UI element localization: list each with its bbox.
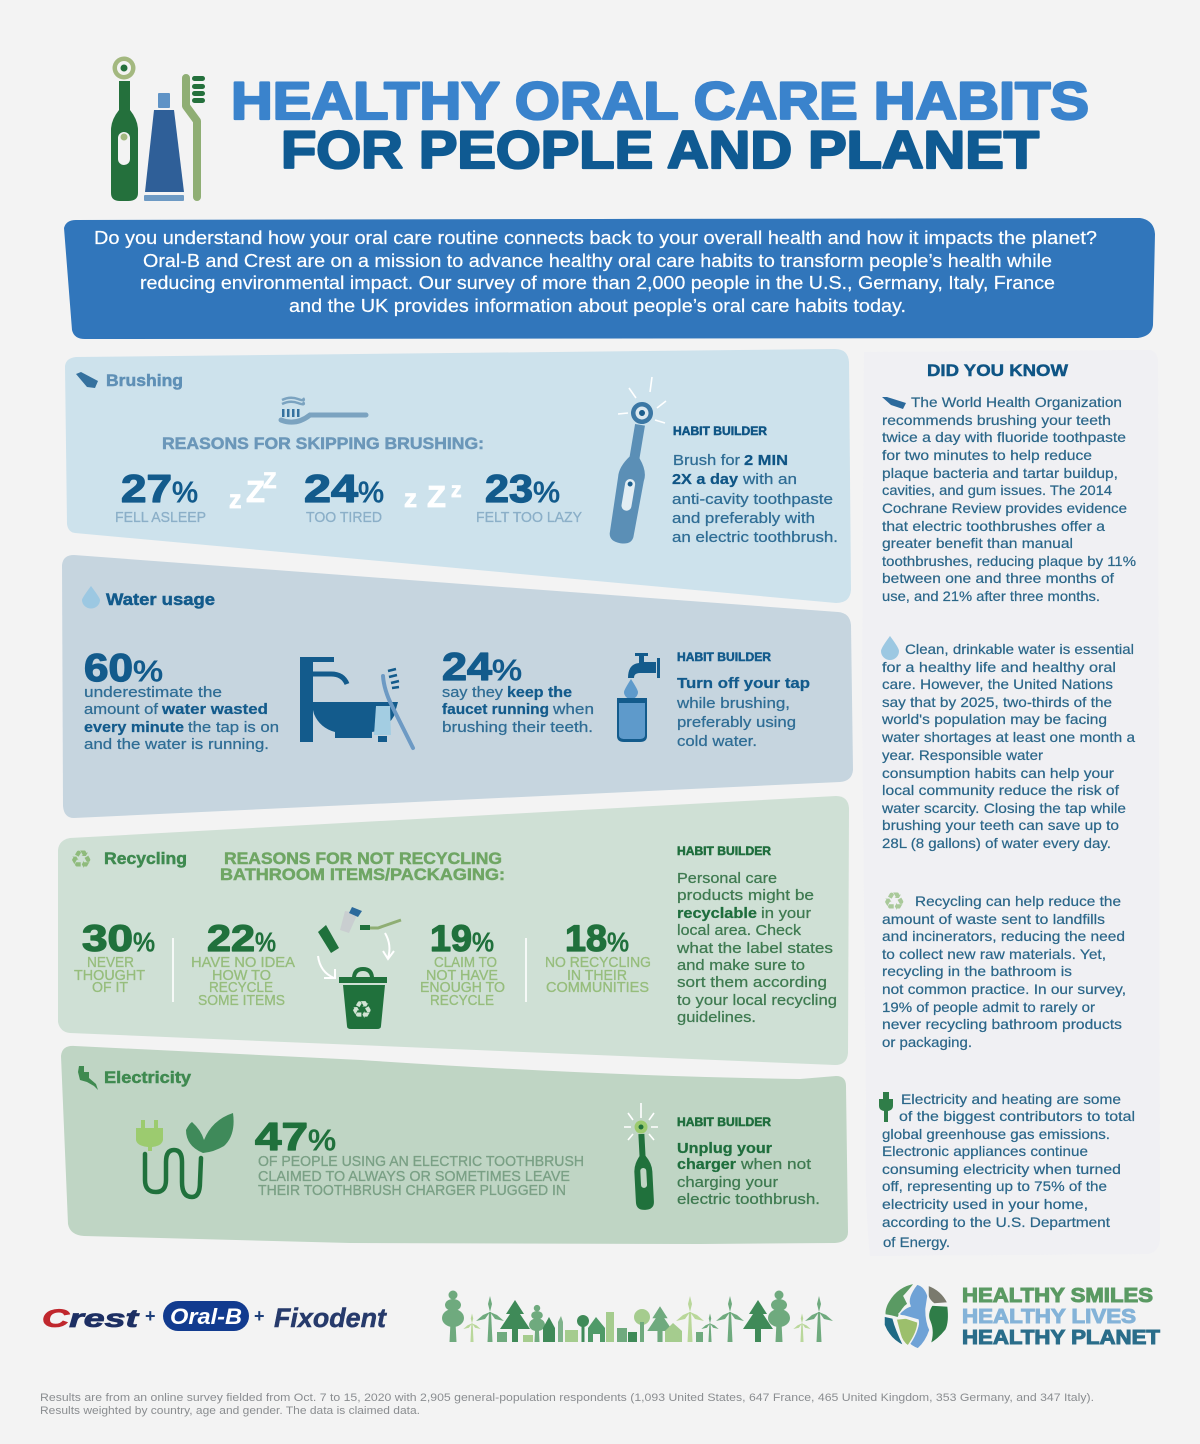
habit builder: brushing: an electric toothbrush. <box>672 529 838 546</box>
stat: 47%: OF PEOPLE USING AN ELECTRIC TOOTHBRUSH <box>258 1154 584 1170</box>
stat: 30%: OF IT <box>92 980 128 996</box>
stat: 19%: RECYCLE <box>430 993 494 1009</box>
did you know: water text: care. However, the United Nations <box>882 676 1113 692</box>
did you know: brushing text: Cochrane Review provides evidence <box>882 500 1127 516</box>
intro banner: Oral-B and Crest are on a mission to advance healthy oral care habits to transform people’s health while <box>143 251 1052 271</box>
stat: 23% felt too lazy: % <box>533 477 560 509</box>
stat: 24% too tired: TOO TIRED <box>306 510 382 526</box>
stat: 47%: CLAIMED TO ALWAYS OR SOMETIMES LEAVE <box>258 1169 570 1185</box>
stat: 22%: 22 <box>207 918 255 959</box>
title <box>231 72 1089 180</box>
heading: did you know: DID YOU KNOW <box>927 361 1069 380</box>
panel: did you know <box>862 350 1160 1256</box>
stat: 47%: % <box>308 1125 336 1157</box>
stat: 22%: RECYCLE <box>209 980 273 996</box>
habit builder: recycling: Personal care <box>677 870 777 887</box>
habit builder: brushing: HABIT BUILDER <box>673 426 768 438</box>
did you know: brushing text: toothbrushes, reducing plaque by 11% <box>882 553 1136 569</box>
did you know: electricity text: according to the U.S. Department <box>882 1214 1110 1230</box>
title: FOR PEOPLE AND PLANET <box>281 121 1039 180</box>
stat: 24%: when <box>552 701 594 718</box>
tagline: healthy smiles healthy lives healthy planet <box>962 1285 1160 1349</box>
stat: 19%: CLAIM TO <box>434 955 497 971</box>
stat: 24% too tired: % <box>358 477 384 509</box>
stat: 24% too tired <box>304 468 384 526</box>
stat: 19%: NOT HAVE <box>426 968 498 984</box>
panel: water usage <box>62 555 853 818</box>
stat: 19%: ENOUGH TO <box>420 980 505 996</box>
heading: water usage: Water usage <box>106 590 215 609</box>
habit builder: electricity: charger <box>677 1156 736 1173</box>
did you know: recycling text: and incinerators, reducing the need <box>882 928 1125 944</box>
footnote: Results weighted by country, age and gender. The data is claimed data. <box>40 1405 420 1417</box>
icon: sleep z <box>229 468 276 514</box>
habit builder: recycling: in your <box>761 905 811 922</box>
habit builder: brushing: with an <box>742 471 797 488</box>
habit builder: recycling: what the label states <box>676 940 833 957</box>
stat: 24% <box>442 646 594 736</box>
did you know: recycling text: recycling in the bathroom is <box>882 963 1072 979</box>
stat: 47%: THEIR TOOTHBRUSH CHARGER PLUGGED IN <box>258 1183 566 1199</box>
panel: brushing <box>65 349 851 603</box>
habit builder: brushing: and preferably with <box>672 510 815 527</box>
habit builder: recycling: recyclable <box>677 905 757 922</box>
intro banner: reducing environmental impact. Our survey of more than 2,000 people in the U.S., Germany, Italy, France <box>140 273 1055 293</box>
stat: 47% <box>255 1116 584 1199</box>
icon: electric toothbrush <box>624 1103 658 1210</box>
did you know: brushing text: use, and 21% after three months. <box>882 588 1100 604</box>
icon: sleep z second <box>404 479 462 514</box>
did you know: electricity text: of the biggest contributors to total <box>899 1108 1135 1124</box>
stat: 60%: every minute <box>84 719 184 736</box>
icon: sink faucet and toothbrush <box>300 657 413 748</box>
did you know: brushing text: recommends brushing your teeth <box>882 412 1111 428</box>
stat: 22%: % <box>255 927 276 957</box>
habit builder: water: while brushing, <box>676 695 790 712</box>
subheading: reasons for not recycling: REASONS FOR NOT RECYCLING <box>224 849 502 868</box>
illustration: green town with turbines and trees <box>442 1290 833 1342</box>
habit builder: electricity: Unplug your <box>677 1140 772 1157</box>
did you know: brushing text: for two minutes to help reduce <box>882 447 1092 463</box>
tagline: healthy smiles healthy lives healthy planet: HEALTHY LIVES <box>962 1306 1136 1328</box>
intro banner: Do you understand how your oral care routine connects back to your overall health and how it impacts the planet? <box>94 228 1097 248</box>
stat: 24%: % <box>492 655 522 687</box>
stat: 60%: underestimate the <box>84 684 222 701</box>
icon: plug <box>78 1066 98 1090</box>
intro banner: and the UK provides information about people’s oral care habits today. <box>289 296 906 316</box>
icon: sleep z second: z <box>451 479 462 502</box>
did you know: brushing text: between one and three months of <box>882 570 1114 586</box>
habit builder: brushing: anti-cavity toothpaste <box>672 491 833 508</box>
did you know: electricity text: of Energy. <box>883 1234 950 1250</box>
habit builder: water: preferably using <box>677 714 796 731</box>
tagline: healthy smiles healthy lives healthy planet: HEALTHY PLANET <box>962 1327 1160 1349</box>
icon: electric toothbrush <box>607 377 666 545</box>
icon: water drop <box>82 586 100 608</box>
stat: 19%: % <box>472 927 494 957</box>
stat: 18%: COMMUNITIES <box>546 980 649 996</box>
logo: globe <box>884 1283 949 1349</box>
stat: 24%: 24 <box>442 646 492 689</box>
stat: 30%: % <box>133 927 155 957</box>
icon: plug and leaf <box>136 1113 234 1197</box>
stat: 60% <box>84 647 279 753</box>
did you know: recycling text <box>882 887 1126 1050</box>
habit builder: recycling <box>676 846 837 1026</box>
habit builder: electricity: charging your <box>677 1174 778 1191</box>
tagline: healthy smiles healthy lives healthy planet: HEALTHY SMILES <box>962 1285 1153 1307</box>
did you know: electricity text: consuming electricity when turned <box>882 1161 1121 1177</box>
habit builder: electricity <box>677 1117 820 1208</box>
habit builder: brushing: 2 MIN <box>744 452 788 469</box>
stat: 30% <box>74 918 155 996</box>
icon: recycling bin with items <box>318 907 401 1029</box>
habit builder: electricity: when not <box>740 1156 812 1173</box>
stat: 19%: 19 <box>430 918 472 959</box>
did you know: recycling text: or packaging. <box>882 1034 972 1050</box>
icon: toothbrush with paste <box>281 398 366 422</box>
icon: recycling bin with items: ♻ <box>351 996 373 1024</box>
stat: 30%: 30 <box>82 918 133 959</box>
footnote <box>40 1392 1094 1417</box>
heading: brushing: Brushing <box>106 371 183 390</box>
subheading: reasons for not recycling: BATHROOM ITEMS/PACKAGING: <box>220 865 505 884</box>
stat: 24%: brushing their teeth. <box>442 719 593 736</box>
habit builder: electricity: electric toothbrush. <box>677 1191 820 1208</box>
did you know: electricity text: electricity used in your home, <box>882 1196 1088 1212</box>
stat: 18% <box>545 918 651 996</box>
stat: 22%: HAVE NO IDEA <box>191 955 295 971</box>
did you know: brushing text: greater benefit than manual <box>882 535 1073 551</box>
logo: fixodent: Fixodent <box>274 1303 387 1333</box>
heading: electricity: Electricity <box>104 1068 192 1087</box>
stat: 60%: the tap is on <box>188 719 279 736</box>
stat: 27% fell asleep: 27 <box>121 468 172 511</box>
icon: toothpaste tube <box>76 372 98 388</box>
habit builder: water <box>676 652 810 750</box>
stat: 30%: THOUGHT <box>74 968 145 984</box>
did you know: brushing text <box>882 394 1136 604</box>
habit builder: recycling: local area. Check <box>677 922 802 939</box>
did you know: recycling text: not common practice. In our survey, <box>882 981 1126 997</box>
did you know: water text: Clean, drinkable water is essential <box>905 641 1134 657</box>
icon: sleep z: Z <box>263 468 276 493</box>
stat: 22%: SOME ITEMS <box>198 993 285 1009</box>
title: HEALTHY ORAL CARE HABITS <box>231 72 1089 131</box>
habit builder: brushing: Brush for <box>673 452 740 469</box>
subheading: reasons for not recycling <box>220 849 505 884</box>
stat: 18%: 18 <box>565 918 607 959</box>
panel: recycling <box>58 796 849 1065</box>
habit builder: recycling: guidelines. <box>677 1009 756 1026</box>
did you know: water text: water scarcity. Closing the tap while <box>881 800 1126 816</box>
did you know: electricity text <box>879 1091 1135 1250</box>
did you know: brushing text: twice a day with fluoride toothpaste <box>882 429 1126 445</box>
icon: sleep z: Z <box>246 474 265 509</box>
did you know: water text <box>881 636 1135 851</box>
logo: oral-b <box>163 1301 249 1331</box>
plus sign: + <box>254 1306 265 1326</box>
stat: 23% felt too lazy <box>476 468 582 526</box>
stat: 60%: and the water is running. <box>84 736 269 753</box>
did you know: recycling text: Recycling can help reduce the <box>915 893 1121 909</box>
did you know: brushing text: that electric toothbrushes offer a <box>882 518 1105 534</box>
stat: 27% fell asleep <box>115 468 206 526</box>
stat: 60%: amount of <box>84 701 159 718</box>
stat: 18%: % <box>607 927 629 957</box>
stat: 24%: keep the <box>507 684 572 701</box>
icon: sleep z second: Z <box>427 479 446 514</box>
icon: tap and glass <box>617 653 660 742</box>
stat: 27% fell asleep: FELL ASLEEP <box>115 510 206 526</box>
habit builder: water: Turn off your tap <box>677 675 810 692</box>
did you know: electricity text: off, representing up to 75% of the <box>882 1178 1107 1194</box>
did you know: water text: say that by 2025, two-thirds of the <box>882 694 1112 710</box>
habit builder: recycling: HABIT BUILDER <box>677 846 772 858</box>
stat: 23% felt too lazy: 23 <box>485 468 533 511</box>
heading: recycling: Recycling <box>104 849 187 868</box>
icon: recycling: ♻ <box>70 845 92 874</box>
did you know: brushing text: plaque bacteria and tartar buildup, <box>882 465 1118 481</box>
did you know: water text: local community reduce the risk of <box>882 782 1119 798</box>
habit builder: brushing: 2X a day <box>672 471 739 488</box>
brand logos <box>42 1301 387 1333</box>
stat: 60%: 60 <box>84 647 133 690</box>
plus sign: + <box>145 1306 156 1326</box>
stat: 22%: HOW TO <box>212 968 271 984</box>
panel: electricity <box>61 1046 848 1244</box>
subheading: reasons for skipping brushing: REASONS FOR SKIPPING BRUSHING: <box>162 434 484 453</box>
did you know: recycling text: ♻ <box>883 887 905 916</box>
stat: 24% too tired: 24 <box>304 468 358 511</box>
did you know: water text: consumption habits can help your <box>882 765 1114 781</box>
did you know: water text: 28L (8 gallons) of water every day. <box>882 835 1111 851</box>
did you know: electricity text: global greenhouse gas emissions. <box>882 1126 1110 1142</box>
did you know: water text: brushing your teeth can save up to <box>882 817 1119 833</box>
stat: 47%: 47 <box>255 1116 308 1159</box>
stat: 23% felt too lazy: FELT TOO LAZY <box>476 510 582 526</box>
icon: sleep z second: z <box>404 483 417 513</box>
stat: 18%: IN THEIR <box>567 968 627 984</box>
logo: crest: C rest <box>42 1305 140 1333</box>
habit builder: electricity: HABIT BUILDER <box>677 1117 772 1129</box>
divider <box>172 938 174 1002</box>
habit builder: recycling: to your local recycling <box>677 992 837 1009</box>
stat: 24%: faucet running <box>442 701 549 718</box>
stat: 18%: NO RECYCLING <box>545 955 651 971</box>
habit builder: recycling: products might be <box>677 887 814 904</box>
habit builder: recycling: and make sure to <box>677 957 805 974</box>
habit builder: recycling: sort them according <box>677 974 827 991</box>
habit builder: water: HABIT BUILDER <box>677 652 772 664</box>
did you know: electricity text: Electronic appliances continue <box>882 1143 1088 1159</box>
stat: 30%: NEVER <box>87 955 134 971</box>
did you know: electricity text: Electricity and heating are some <box>901 1091 1121 1107</box>
stat: 60%: % <box>133 656 163 688</box>
did you know: recycling text: amount of waste sent to landfills <box>882 911 1105 927</box>
habit builder: water: cold water. <box>677 733 757 750</box>
stat: 27% fell asleep: % <box>172 477 198 509</box>
stat: 24%: say they <box>442 684 504 701</box>
stat: 60%: water wasted <box>161 701 268 718</box>
did you know: recycling text: 19% of people admit to rarely or <box>882 999 1095 1015</box>
habit builder: brushing <box>672 426 838 546</box>
stat: 19% <box>420 918 505 1009</box>
intro banner <box>64 218 1155 339</box>
stat: 22% <box>191 918 295 1009</box>
did you know: recycling text: to collect new raw materials. Yet, <box>882 946 1106 962</box>
header icons: toothbrush and toothpaste <box>111 56 205 201</box>
logo: oral-b: Oral-B <box>170 1304 242 1329</box>
did you know: brushing text: The World Health Organization <box>911 394 1122 410</box>
did you know: recycling text: never recycling bathroom products <box>882 1016 1122 1032</box>
footnote: Results are from an online survey fielded from Oct. 7 to 15, 2020 with 2,905 general-population respondents (1,093 United States, 647 France, 465 United Kingdom, 353 Germany, and 347 Italy). <box>40 1392 1094 1404</box>
did you know: water text: for a healthy life and healthy oral <box>882 659 1116 675</box>
did you know: water text: year. Responsible water <box>882 747 1043 763</box>
did you know: water text: world's population may be facing <box>881 711 1107 727</box>
icon: sleep z: z <box>229 486 242 514</box>
divider <box>525 938 527 1002</box>
did you know: brushing text: cavities, and gum issues. The 2014 <box>882 482 1112 498</box>
did you know: water text: water shortages at least one month a <box>881 729 1135 745</box>
